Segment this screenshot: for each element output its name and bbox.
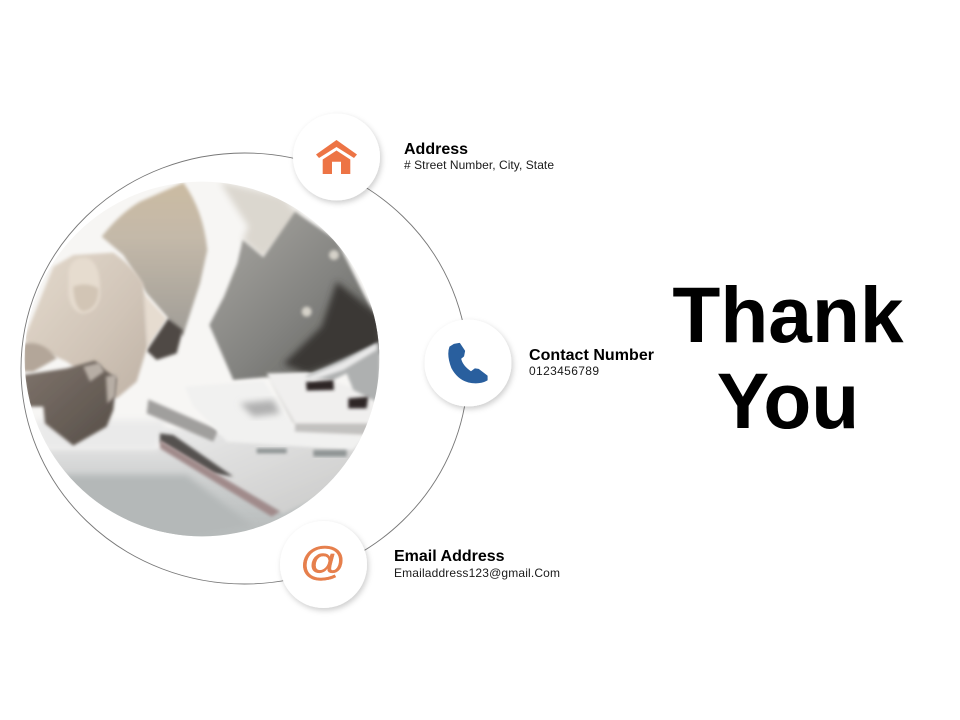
lower book pages <box>157 427 363 513</box>
title: thank you: Thank <box>672 271 904 359</box>
glasses highlight <box>307 343 377 380</box>
email icon badge <box>280 521 367 608</box>
thumbnail <box>73 285 98 312</box>
dark cuff <box>147 318 183 360</box>
contact item: phone <box>424 320 654 406</box>
blurred table marks <box>257 448 347 457</box>
pink page stripe <box>160 440 280 517</box>
outer orbit ring <box>21 153 468 584</box>
right person's collar <box>220 182 300 258</box>
right person's shirt <box>209 212 380 380</box>
desk surface <box>50 448 346 536</box>
paper print <box>240 400 280 417</box>
contact detail: 0123456789 <box>529 364 599 378</box>
title: thank you: You <box>717 357 859 445</box>
dark shirt shadow <box>283 282 380 373</box>
email heading: Email Address <box>394 548 505 565</box>
address icon badge <box>293 114 380 200</box>
wrist <box>144 294 166 346</box>
email detail: Emailaddress123@gmail.Com <box>394 566 560 580</box>
icon: at sign: @ <box>300 540 346 584</box>
glasses dark parts <box>306 380 368 408</box>
book spine edge <box>147 399 218 442</box>
upper hand <box>25 253 147 398</box>
icon: house <box>316 140 357 174</box>
knuckle highlights <box>83 363 117 403</box>
contact item: email <box>280 521 560 608</box>
contact heading: Contact Number <box>529 347 654 364</box>
photo: handshake over desk <box>20 177 387 543</box>
phone icon badge <box>424 320 512 406</box>
address heading: Address <box>404 141 468 158</box>
finger nail at left <box>23 343 57 372</box>
icon: phone handset <box>449 344 487 383</box>
left sleeve <box>102 183 207 337</box>
shirt buttons <box>302 250 339 317</box>
glasses lens <box>305 342 380 403</box>
white band above desk <box>38 422 163 446</box>
address detail: # Street Number, City, State <box>404 158 554 172</box>
darker desk panel <box>66 473 237 536</box>
dark book stripes <box>160 433 233 477</box>
notebook side <box>277 392 368 436</box>
contact item: address <box>293 114 554 200</box>
lower dark fingers <box>23 361 117 446</box>
thumb <box>68 258 100 313</box>
stacked notebook <box>266 370 312 378</box>
papers <box>212 426 360 450</box>
